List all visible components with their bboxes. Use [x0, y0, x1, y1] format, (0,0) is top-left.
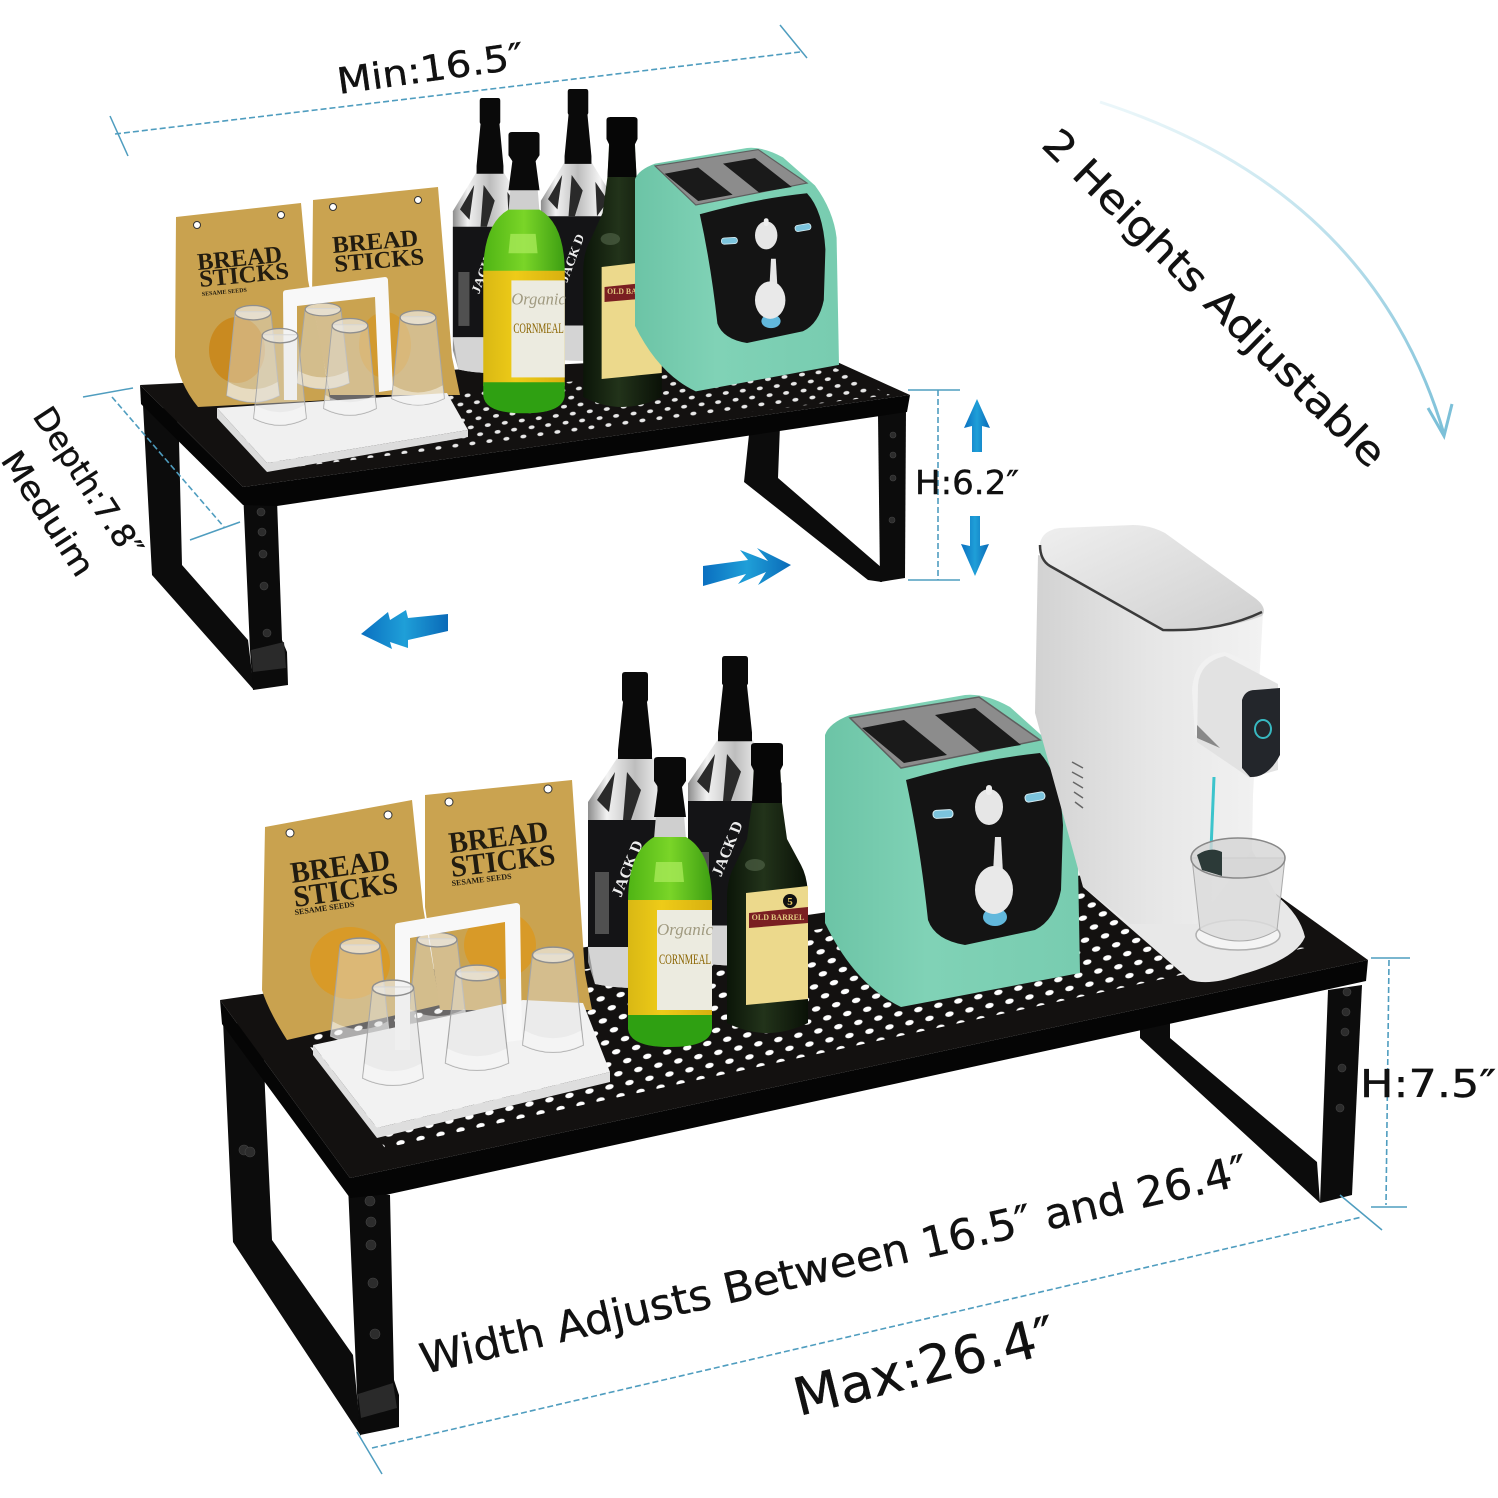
label: depth: Depth:7.8″: [25, 400, 151, 565]
upper shelf front-left leg: [243, 490, 288, 690]
glass dark reflection: [1197, 850, 1222, 876]
curved height arrow: [1100, 102, 1452, 436]
upper shelf perforation: [225, 358, 890, 470]
water stream: [1211, 777, 1214, 850]
lower bottles: [588, 656, 808, 1047]
label: max width: Max:26.4″: [788, 1306, 1062, 1429]
upper bread bags: STICKS: [333, 244, 425, 278]
lower shelf front-right leg: [1320, 985, 1362, 1203]
upper bread bags: [175, 187, 460, 407]
upper shelf front-right leg: [878, 408, 906, 582]
glass base ring: [1196, 920, 1280, 950]
upper glass rack: [217, 277, 468, 472]
lower leg bolts: [239, 988, 1351, 1339]
lower glass rack: [313, 903, 610, 1138]
lower shelf front-left leg: [348, 1185, 399, 1435]
spout shadow: [1197, 725, 1220, 748]
lower bag right: [425, 780, 592, 1010]
lower bread bags: [262, 780, 592, 1040]
dispenser spout plate: [1192, 652, 1250, 760]
arrow: expand right: [703, 548, 791, 586]
arrow: down: [961, 516, 989, 576]
dispenser spout: [1197, 656, 1278, 778]
label: upper height: H:6.2″: [915, 463, 1019, 502]
lower bread bags: SESAME SEEDS: [294, 900, 355, 917]
glass rim: [1191, 838, 1285, 878]
dimension: maximum width: [357, 1195, 1382, 1474]
upper bag right: [312, 187, 460, 395]
lower bread bags: BREAD: [288, 843, 392, 890]
lower toaster: [825, 695, 1080, 1007]
dispenser chrome rim: [1040, 545, 1262, 630]
dimension: minimum width: [110, 25, 807, 156]
upper shelf left edge: [140, 385, 243, 505]
upper bottles: [453, 89, 662, 413]
dimension: upper height: [908, 390, 960, 580]
upper bread bags: BREAD: [331, 226, 419, 259]
dispenser vents: [1072, 762, 1083, 808]
upper toaster: [635, 148, 839, 391]
lower shelf back-left leg: [223, 1020, 361, 1436]
lower bag left: [262, 800, 440, 1040]
dispenser display: [1242, 688, 1280, 777]
upper bread bags: BREAD: [196, 242, 283, 276]
upper shelf back-right leg: [744, 425, 882, 582]
label: width adjusts: Width Adjusts Between 16.5″ and 26.4″: [415, 1145, 1253, 1384]
lower bread bags: STICKS: [291, 867, 400, 914]
lower shelf top surface: [220, 855, 1368, 1178]
lower bread bags: BREAD: [447, 815, 550, 860]
label: min width: Min:16.5″: [335, 36, 526, 103]
dispenser indicator: [1255, 720, 1271, 738]
upper bread bags: STICKS: [198, 258, 290, 293]
arrow: up: [964, 399, 990, 452]
upper shelf: [140, 352, 910, 690]
upper leg bolts: [257, 432, 896, 637]
lower shelf front edge: [350, 960, 1368, 1198]
arrow: expand left: [361, 610, 448, 649]
upper bread bags: SESAME SEEDS: [202, 288, 248, 298]
lower bread bags: STICKS: [449, 838, 557, 884]
label: lower height: H:7.5″: [1360, 1062, 1496, 1106]
drinking glass: [1192, 858, 1285, 941]
upper shelf back-left leg: [143, 405, 254, 690]
label: 2 heights adjustable: 2 Heights Adjustable: [1033, 120, 1395, 477]
dimension: lower height: [1371, 958, 1410, 1207]
upper shelf front edge: [243, 395, 910, 506]
upper foot highlight: [251, 642, 286, 672]
lower bread bags: SESAME SEEDS: [451, 872, 513, 888]
dispenser lid: [1040, 525, 1264, 630]
lower shelf: [220, 855, 1368, 1436]
lower shelf back-right leg: [1140, 1020, 1320, 1203]
upper bag left: [175, 203, 330, 407]
dispenser body: [1035, 555, 1263, 924]
lower foot highlight: [358, 1383, 397, 1418]
upper shelf top surface: [140, 352, 910, 487]
water dispenser: [1035, 525, 1305, 982]
dimension: depth: [83, 388, 240, 540]
dispenser base: [1083, 850, 1305, 982]
lower shelf perforation: [290, 862, 1305, 1148]
lower shelf left edge: [220, 1000, 350, 1198]
